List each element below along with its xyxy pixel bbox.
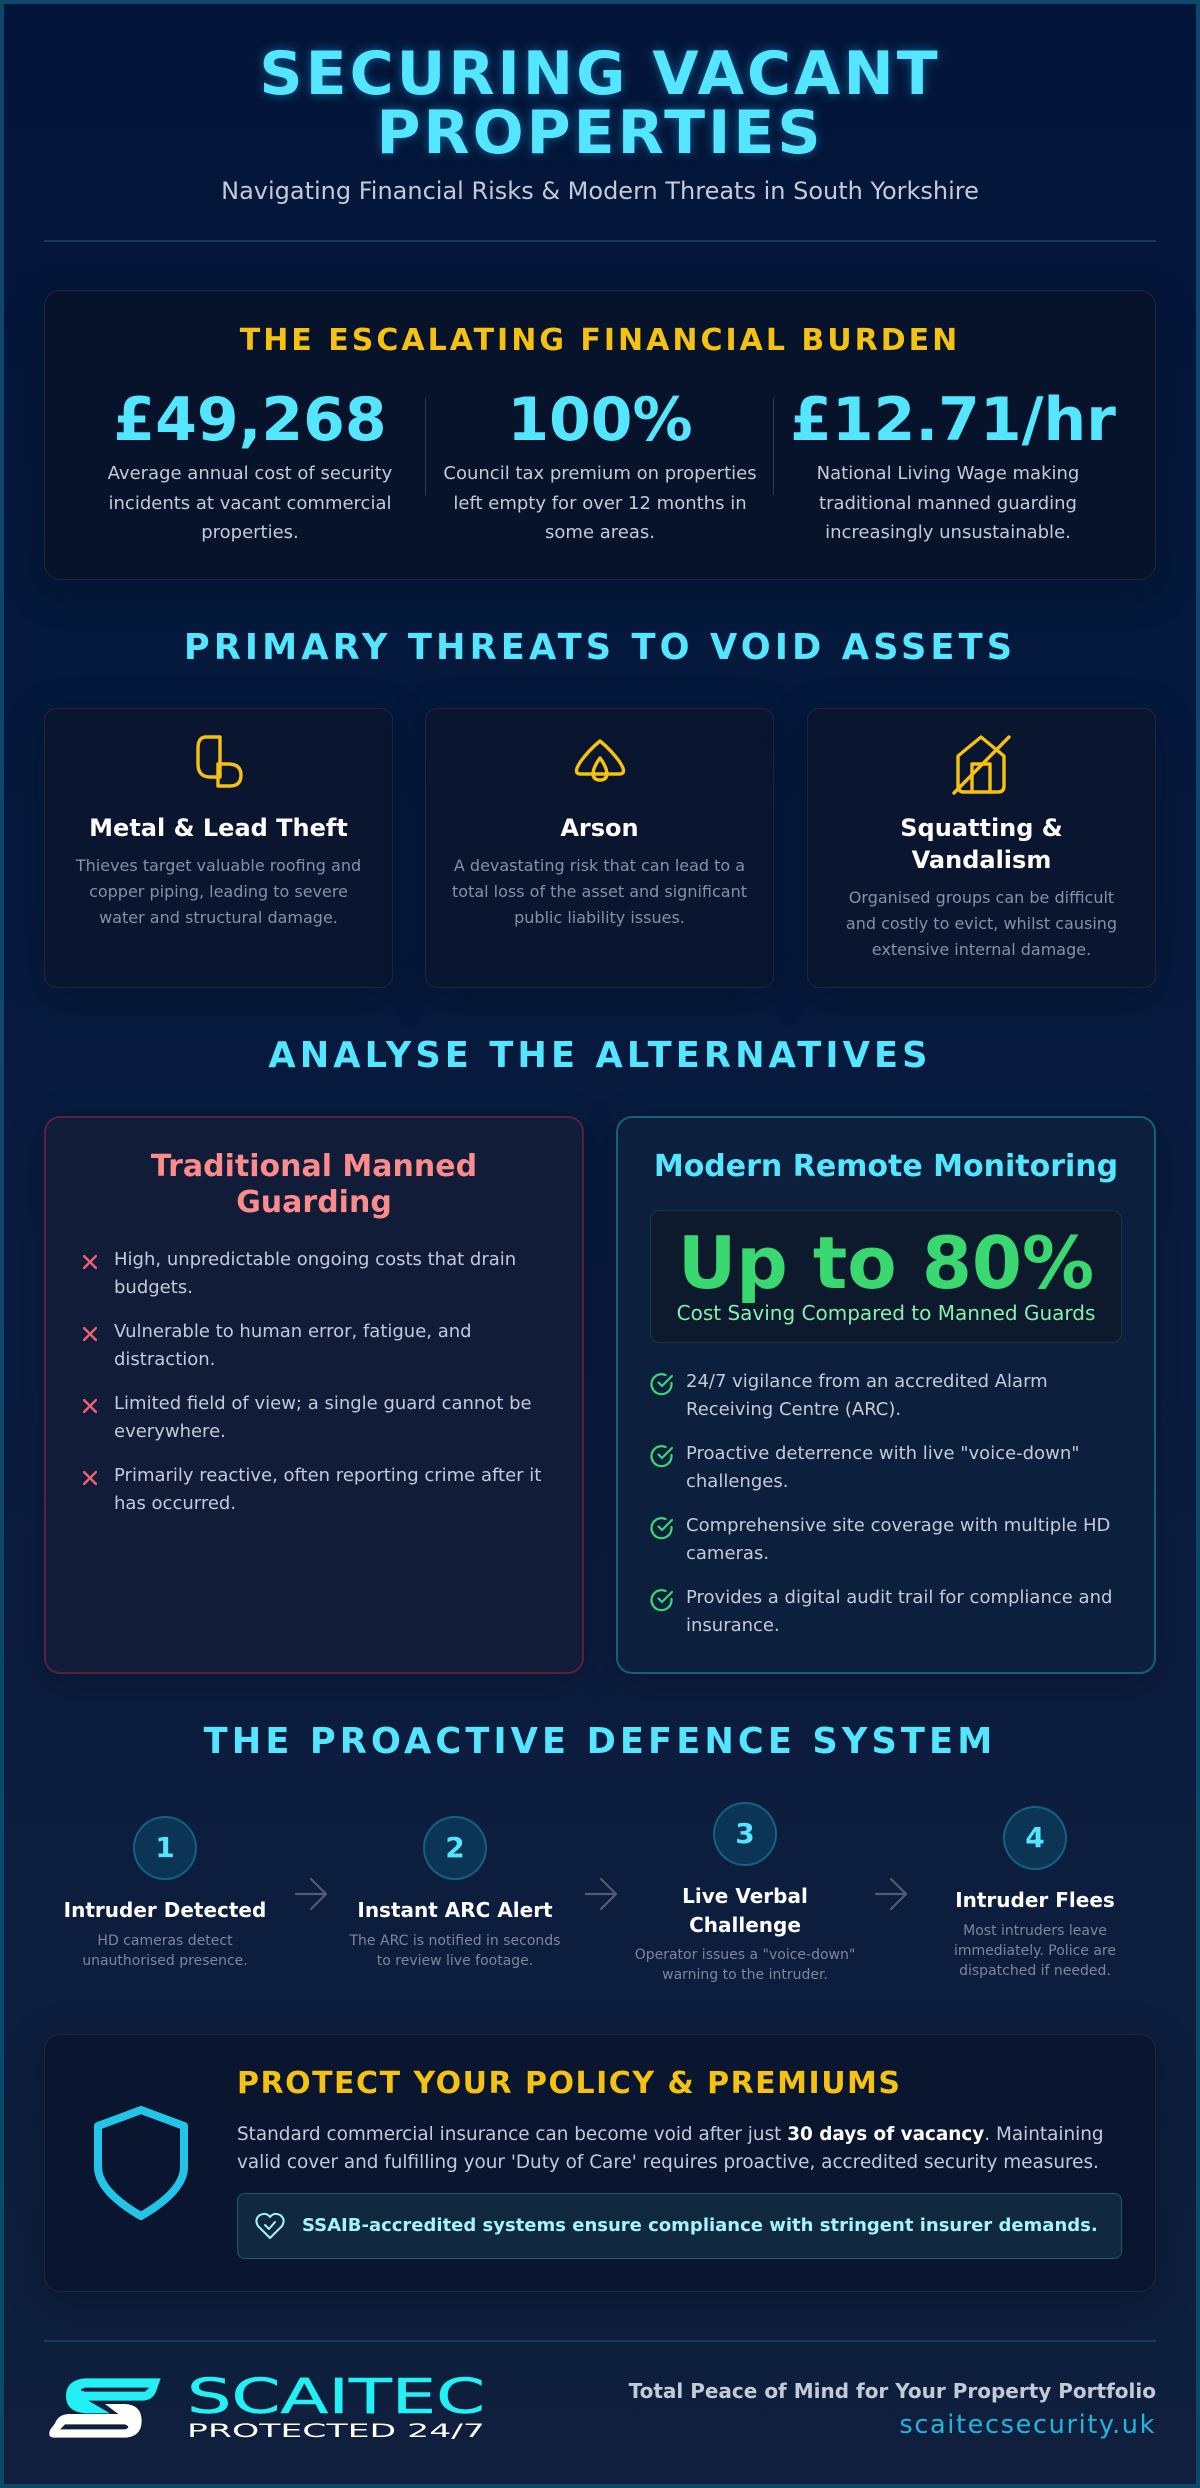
stat: living wage: National Living Wage making [817, 463, 1079, 484]
text: vacancy warning [237, 2124, 1104, 2173]
logo: Scaitec [49, 2370, 485, 2442]
text: SSAIB: SSAIB-accredited systems ensure compliance with stringent insurer demands. [302, 2215, 1098, 2236]
title: PROPERTIES [376, 98, 824, 168]
step 2: to review live footage. [377, 1953, 533, 1969]
panel: policy and premiums [44, 2034, 1156, 2292]
panel: financial burden [44, 290, 1156, 580]
list: benefits: Provides a digital audit trail for compliance and [686, 1587, 1112, 1608]
step 3: warning to the intruder. [662, 1967, 828, 1983]
step 3: Operator issues a "voice-down" [635, 1947, 855, 1963]
stat: annual cost: incidents at vacant commercial [109, 493, 391, 514]
stat: living wage: £12.71/hr [790, 385, 1116, 455]
stat: living wage [790, 385, 1116, 543]
stat: annual cost: properties. [201, 522, 299, 543]
callout: 80 percent saving [650, 1210, 1122, 1343]
icon: heart check [255, 2212, 285, 2239]
list: drawbacks: budgets. [114, 1277, 193, 1298]
icon: flame [574, 739, 626, 782]
step 2 [349, 1816, 560, 1969]
step 4: 4 [1025, 1821, 1045, 1854]
list: drawbacks [83, 1249, 541, 1514]
title: SECURING VACANT [259, 39, 941, 109]
stat: living wage: traditional manned guarding [819, 493, 1077, 514]
text: arson: public liability issues. [514, 908, 685, 927]
logo: Scaitec: SCAITEC [187, 2370, 485, 2425]
list: benefits: insurance. [686, 1615, 780, 1636]
footer text: Total Peace of Mind for Your Property Portfolio [629, 2379, 1156, 2403]
list: benefits: Receiving Centre (ARC). [686, 1399, 901, 1420]
icon: shield [94, 2106, 188, 2220]
heading: traditional [151, 1149, 477, 1220]
text: arson [452, 814, 747, 927]
stat: council tax premium: left empty for over 12 months in [453, 493, 747, 514]
stat: council tax premium: some areas. [545, 522, 655, 543]
step 3 [635, 1802, 855, 1983]
list: drawbacks: Limited field of view; a single guard cannot be [114, 1393, 532, 1414]
step 1: 1 [155, 1831, 175, 1864]
callout: SSAIB [237, 2193, 1122, 2259]
stat: annual cost [108, 385, 392, 543]
text: squatting: Organised groups can be difficult [849, 888, 1114, 907]
heading: financial burden: THE ESCALATING FINANCIAL BURDEN [240, 323, 960, 358]
stat: council tax premium [443, 385, 757, 543]
text: squatting: extensive internal damage. [872, 940, 1091, 959]
heading: primary threats: PRIMARY THREATS TO VOID ASSETS [184, 627, 1016, 668]
list: benefits: Comprehensive site coverage with multiple HD [686, 1515, 1110, 1536]
list: benefits: Proactive deterrence with live "voice-down" [686, 1443, 1080, 1464]
list: drawbacks: Vulnerable to human error, fatigue, and [114, 1321, 472, 1342]
step 4: Most intruders leave [963, 1923, 1107, 1939]
heading: alternatives: ANALYSE THE ALTERNATIVES [268, 1035, 932, 1076]
stat: annual cost: £49,268 [113, 385, 387, 455]
step 4: immediately. Police are [954, 1943, 1116, 1959]
text: vacancy warning: valid cover and fulfilling your 'Duty of Care' requires proactive, accredited security measures. [237, 2152, 1099, 2173]
footer text: scaitecsecurity.uk [899, 2410, 1156, 2440]
list: drawbacks: High, unpredictable ongoing costs that drain [114, 1249, 516, 1270]
callout: 80 percent saving: Up to 80% [678, 1221, 1094, 1305]
text: metal theft: water and structural damage. [99, 908, 338, 927]
list: benefits: cameras. [686, 1543, 769, 1564]
panel: metal theft [44, 708, 393, 988]
stat: annual cost: Average annual cost of security [108, 463, 392, 484]
step 2: The ARC is notified in seconds [350, 1933, 560, 1949]
panel: traditional guarding [44, 1116, 584, 1674]
list: drawbacks: distraction. [114, 1349, 215, 1370]
text: metal theft: Metal & Lead Theft [89, 814, 348, 842]
footer text [628, 2379, 1156, 2440]
list: drawbacks: has occurred. [114, 1493, 236, 1514]
text: squatting: and costly to evict, whilst causing [846, 914, 1117, 933]
panel: squatting [807, 708, 1156, 988]
step 1: unauthorised presence. [82, 1953, 248, 1969]
text: arson: A devastating risk that can lead to a [454, 856, 745, 875]
list: drawbacks: everywhere. [114, 1421, 226, 1442]
step 4: dispatched if needed. [959, 1963, 1111, 1979]
panel: arson [425, 708, 774, 988]
arrow 1 [295, 1878, 328, 1910]
text: metal theft [76, 814, 361, 927]
text: squatting [846, 814, 1117, 959]
text: arson: Arson [560, 814, 639, 842]
callout: 80 percent saving: Cost Saving Compared to Manned Guards [677, 1301, 1095, 1325]
list: benefits: challenges. [686, 1471, 788, 1492]
text: vacancy warning: Standard commercial insurance can become void after just 30 days of vacancy. Maintaining [237, 2124, 1104, 2145]
text: squatting: Vandalism [912, 846, 1051, 874]
icon: damaged house [952, 735, 1011, 795]
stat: council tax premium: Council tax premium on properties [443, 463, 757, 484]
text: metal theft: copper piping, leading to severe [89, 882, 348, 901]
panel: remote monitoring [616, 1116, 1156, 1674]
step 1 [64, 1816, 266, 1969]
heading: defence system: THE PROACTIVE DEFENCE SYSTEM [204, 1721, 996, 1762]
list: benefits [650, 1371, 1112, 1636]
step 3: Live Verbal [682, 1884, 808, 1908]
step 3: 3 [735, 1817, 755, 1850]
step 2: Instant ARC Alert [357, 1898, 553, 1922]
text: arson: total loss of the asset and significant [452, 882, 747, 901]
step 4: Intruder Flees [955, 1888, 1115, 1912]
stat: living wage: increasingly unsustainable. [825, 522, 1071, 543]
text: squatting: Squatting & [900, 814, 1063, 842]
arrow 3 [875, 1878, 908, 1910]
list: benefits: 24/7 vigilance from an accredited Alarm [686, 1371, 1048, 1392]
icon: pipe [196, 735, 243, 788]
step 1: HD cameras detect [97, 1933, 233, 1949]
logo: Scaitec: PROTECTED 24/7 [187, 2420, 485, 2442]
title [258, 39, 942, 168]
step 3: Challenge [689, 1913, 801, 1937]
heading: traditional: Traditional Manned [151, 1149, 477, 1184]
heading: traditional: Guarding [236, 1185, 392, 1220]
arrow 2 [585, 1878, 618, 1910]
heading: modern: Modern Remote Monitoring [654, 1149, 1118, 1184]
step 4 [954, 1806, 1116, 1979]
subtitle: Navigating Financial Risks & Modern Threats in South Yorkshire [221, 177, 979, 205]
text: metal theft: Thieves target valuable roofing and [76, 856, 361, 875]
step 1: Intruder Detected [64, 1898, 266, 1922]
stat: council tax premium: 100% [507, 385, 693, 455]
heading: policy: PROTECT YOUR POLICY & PREMIUMS [237, 2066, 902, 2101]
list: drawbacks: Primarily reactive, often reporting crime after it [114, 1465, 541, 1486]
step 2: 2 [445, 1831, 465, 1864]
